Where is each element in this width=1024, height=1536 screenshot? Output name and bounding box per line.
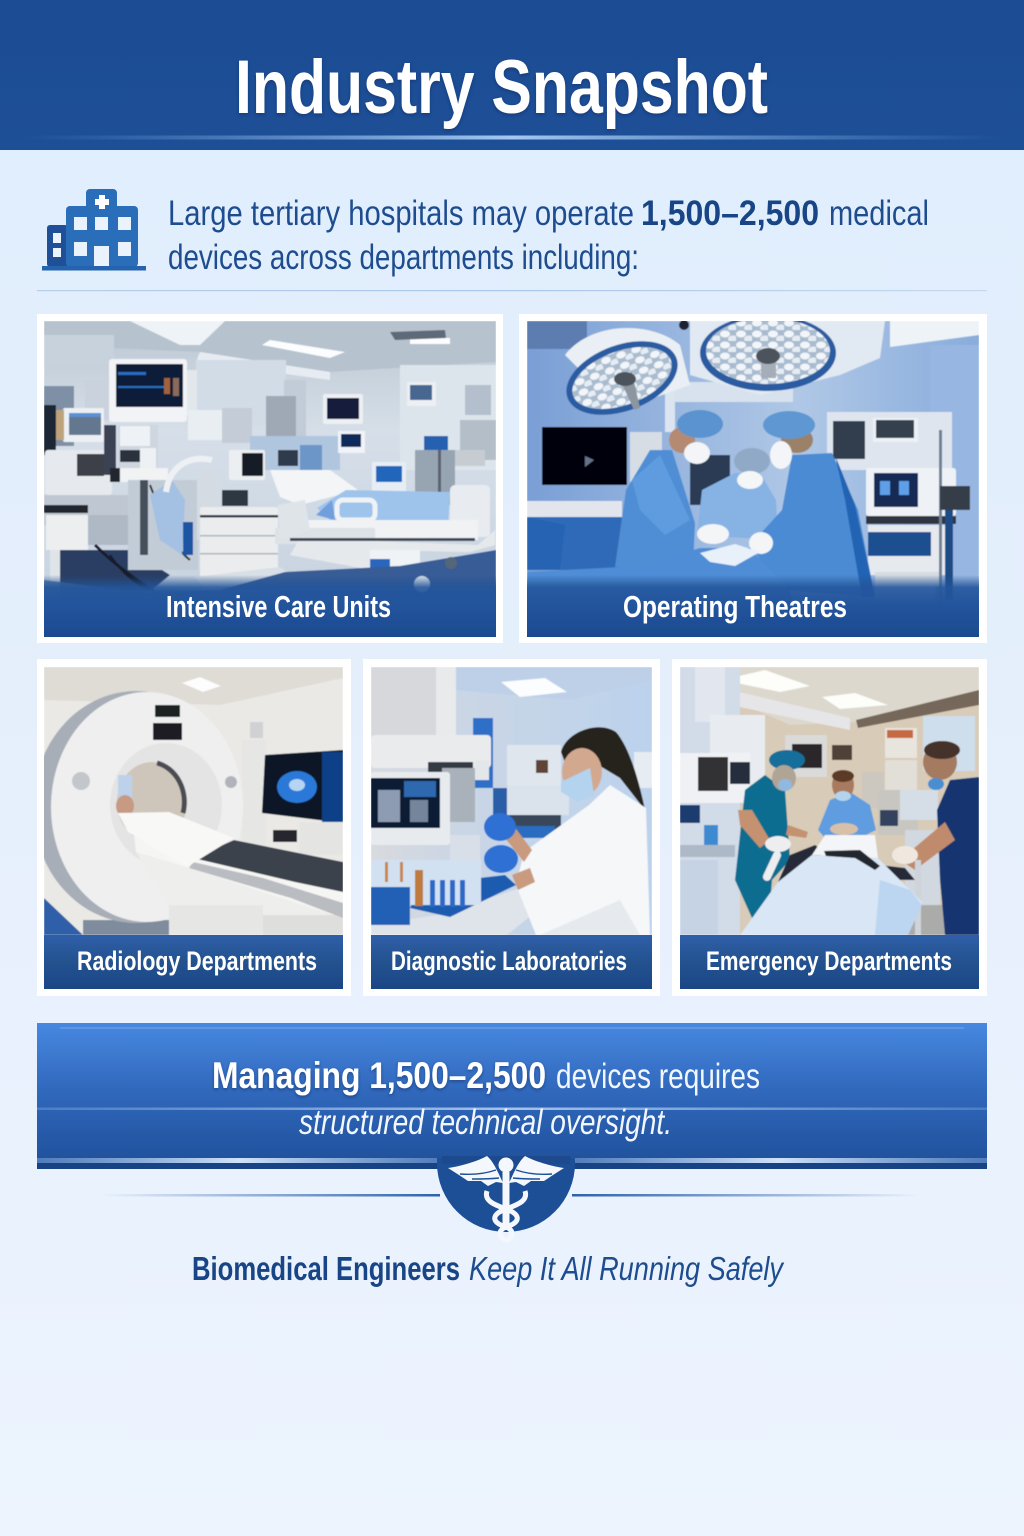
caption band [680, 935, 979, 989]
callout text line 1: devices requires [556, 1057, 760, 1096]
scanner table [138, 854, 176, 866]
photo: CT scanner [33, 667, 343, 989]
wall monitor [542, 427, 627, 485]
callout text line 1: Managing 1,500–2,500 [212, 1055, 546, 1096]
icon: hospital building [42, 189, 146, 270]
left equipment column [680, 667, 740, 935]
caption: Radiology Departments [77, 946, 317, 976]
caption: Emergency Departments [706, 946, 952, 976]
gantry [44, 690, 148, 924]
panel: intensive care units [37, 314, 503, 643]
ceiling arm [668, 382, 793, 402]
intro text: medical [829, 194, 929, 233]
callout text line 2: structured technical oversight. [299, 1103, 672, 1142]
floor and lower left [44, 898, 83, 935]
tubes and tray [450, 835, 480, 860]
caption band [44, 575, 496, 637]
surgeon centre [697, 448, 778, 540]
intro text: 1,500–2,500 [641, 194, 819, 233]
caption band [371, 935, 652, 989]
intro text: devices across departments including: [168, 238, 639, 277]
analyser and monitor [371, 735, 491, 768]
caption band [44, 935, 343, 989]
header banner [0, 0, 1024, 150]
surgeon left [615, 410, 729, 568]
panel: operating theatres [519, 314, 987, 643]
nurse in teal [735, 750, 808, 918]
closing tagline: Biomedical Engineers [192, 1250, 460, 1287]
decorative rules [100, 1194, 440, 1196]
caption: Operating Theatres [623, 589, 847, 624]
surgeon right [749, 411, 875, 597]
closing tagline: Keep It All Running Safely [469, 1250, 785, 1287]
right equipment and floor [905, 830, 940, 905]
monitor [262, 750, 343, 823]
title: Industry Snapshot [235, 45, 768, 130]
photo: operating room [527, 315, 979, 637]
caption band [527, 575, 979, 637]
clinician in navy [892, 741, 979, 935]
intro text [168, 194, 929, 277]
patient drape [527, 548, 780, 590]
photo: lab technician [371, 667, 652, 989]
intro text: Large tertiary hospitals may operate [168, 194, 634, 233]
closing tagline [192, 1250, 785, 1287]
surgical light 1 [566, 340, 678, 416]
background instruments [507, 745, 561, 788]
panel: diagnostic laboratories [363, 659, 660, 996]
surgical light 2 [700, 315, 836, 391]
photo: ICU room [44, 321, 496, 637]
technician [561, 727, 645, 810]
right equipment [827, 412, 952, 470]
left carts and cables [44, 495, 134, 525]
photo: emergency room [680, 667, 979, 989]
bed [270, 470, 358, 505]
middle clinician [818, 770, 876, 838]
panel: radiology departments [33, 659, 351, 996]
callout banner [37, 1023, 987, 1169]
large monitor [109, 359, 187, 422]
icon: caduceus emblem [437, 1094, 575, 1241]
stretcher and patient [740, 823, 922, 935]
caption: Diagnostic Laboratories [391, 946, 627, 976]
floor [224, 550, 496, 596]
small monitor and cart [229, 450, 265, 480]
right monitors [323, 394, 363, 424]
caption: Intensive Care Units [166, 589, 391, 624]
panel: emergency departments [672, 659, 987, 996]
